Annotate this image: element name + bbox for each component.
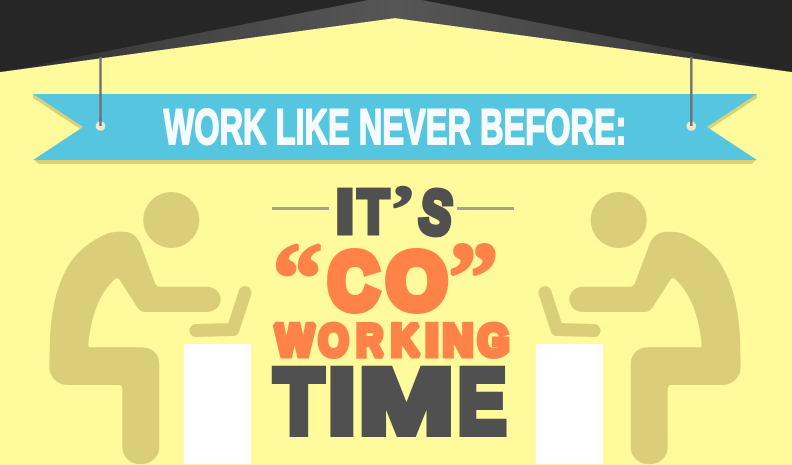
headline: "CO": ” — [448, 222, 498, 333]
right hanger — [686, 57, 696, 131]
headline: IT'S: T — [358, 177, 389, 247]
right rule — [457, 207, 514, 210]
headline: IT'S: I — [335, 177, 354, 247]
headline: IT'S — [335, 172, 457, 250]
headline: WORKING: R — [356, 316, 383, 365]
banner — [33, 94, 757, 164]
headline: "CO": O — [387, 236, 447, 325]
headline: IT'S: ’ — [389, 172, 417, 249]
headline: WORKING: O — [318, 316, 348, 365]
headline: TIME: T — [274, 351, 323, 453]
roof — [0, 0, 792, 72]
headline: TIME: E — [458, 351, 506, 453]
headline: WORKING: I — [425, 316, 438, 365]
left person — [49, 192, 245, 464]
headline: WORKING: W — [275, 316, 314, 365]
headline: TIME: I — [328, 351, 356, 453]
headline: "CO" — [272, 222, 498, 333]
headline: IT'S: S — [415, 177, 457, 250]
right person — [545, 192, 741, 464]
headline: "CO": “ — [272, 222, 322, 333]
headline: WORKING: K — [391, 316, 419, 365]
left rule — [272, 207, 329, 210]
headline: WORKING: G — [478, 316, 509, 365]
left hanger — [96, 57, 105, 131]
left white desk — [184, 344, 251, 464]
headline — [272, 172, 514, 453]
right white desk — [536, 344, 603, 464]
headline: "CO": C — [329, 236, 378, 325]
headline: WORKING: N — [443, 316, 473, 365]
headline: TIME: M — [359, 351, 454, 453]
